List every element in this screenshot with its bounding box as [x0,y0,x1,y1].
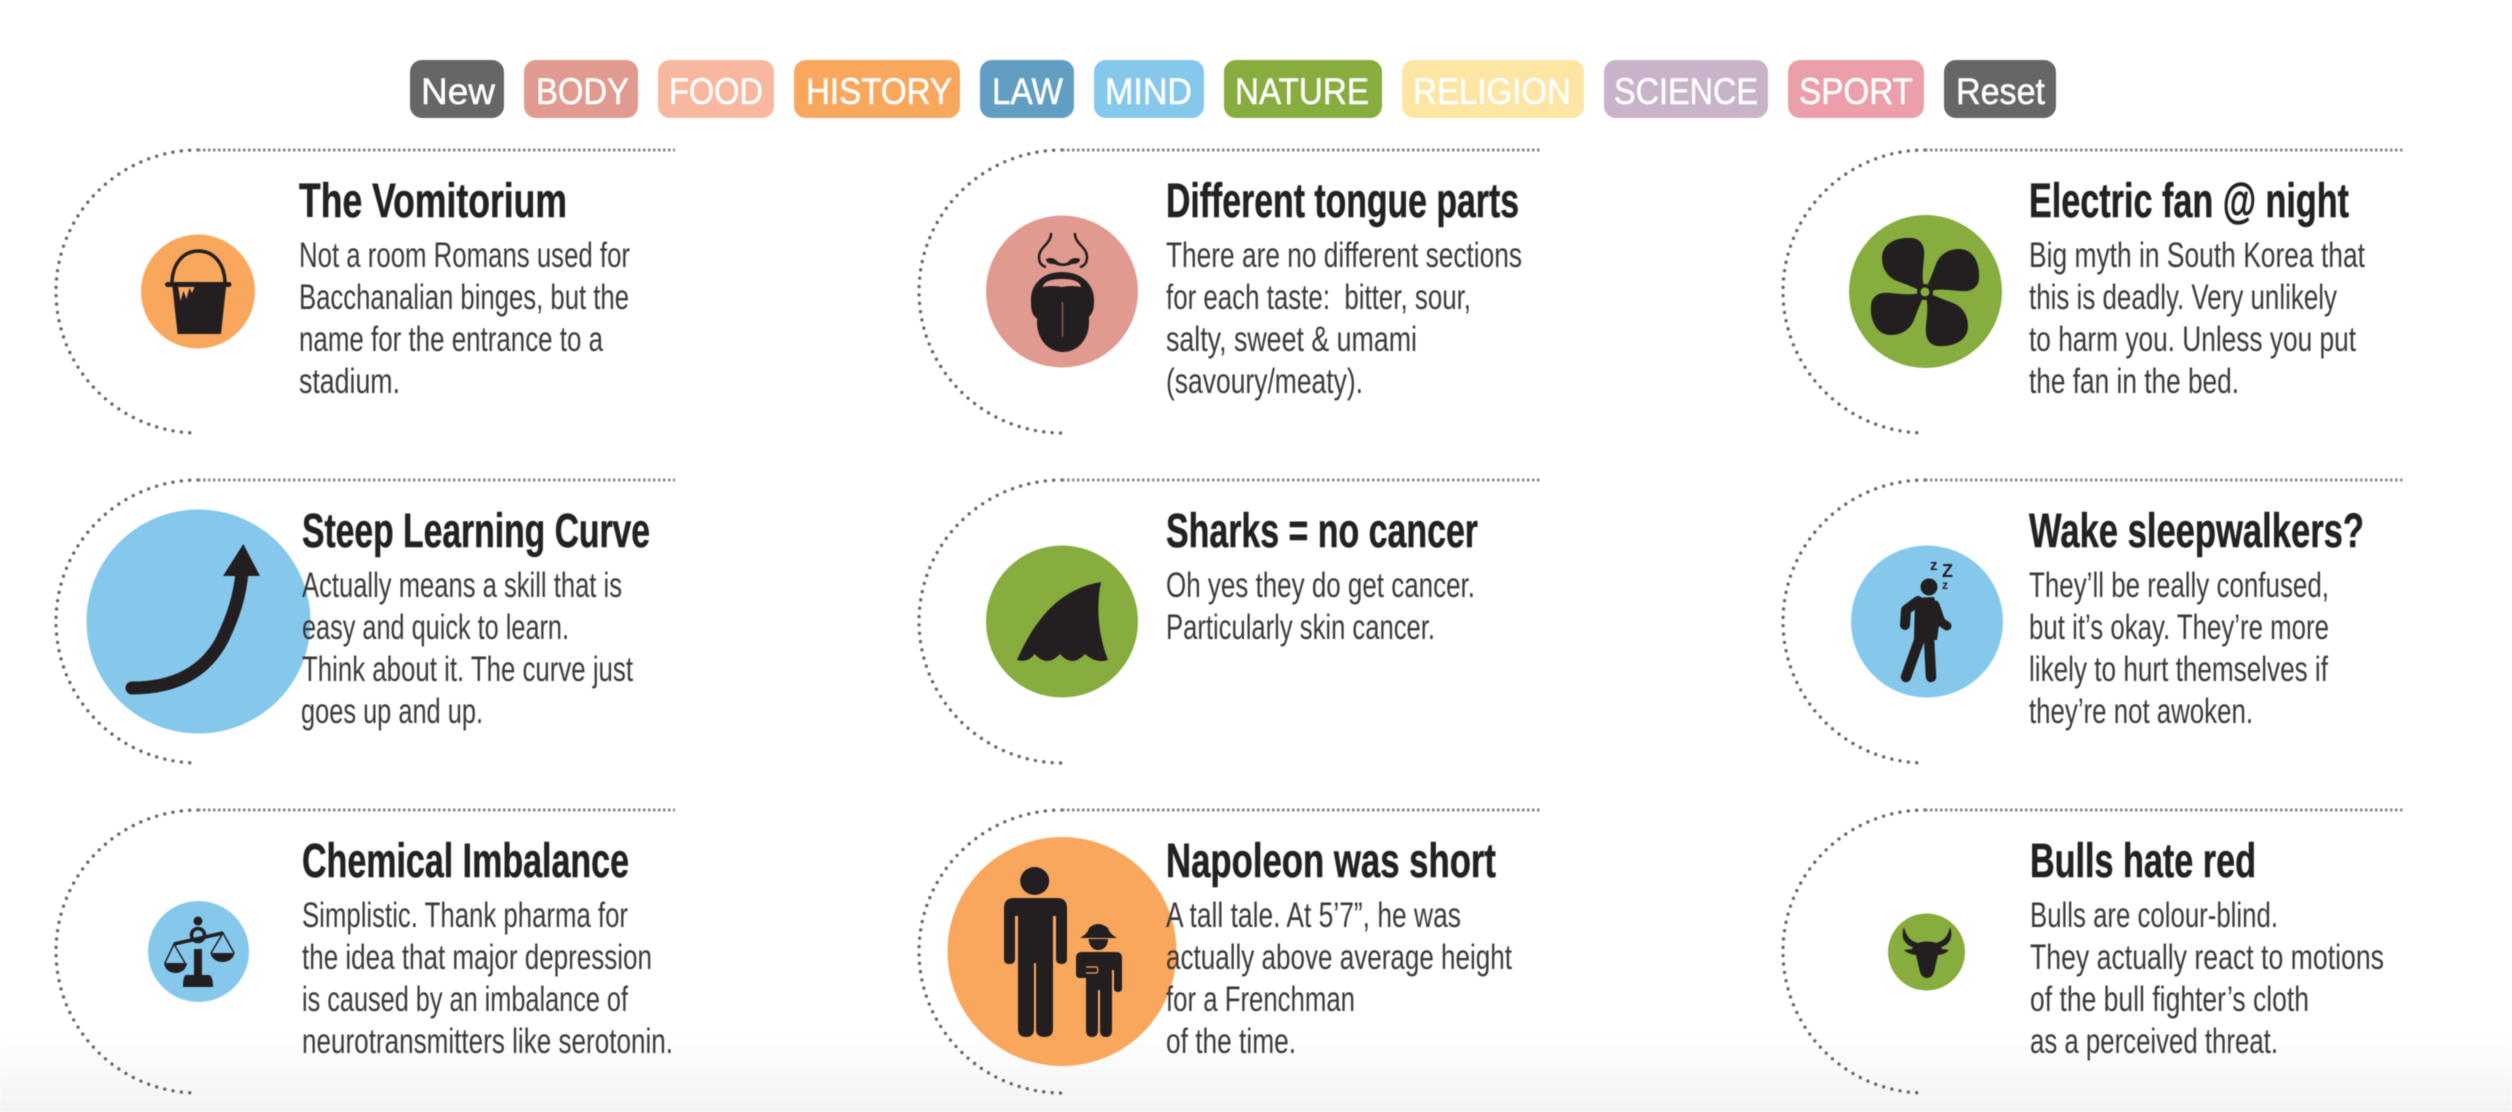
text block: actually above average height [1166,938,1512,977]
panel: Bulls hate red [1783,810,2403,1093]
text block [302,896,673,1061]
text block: They’ll be really confused, [2029,566,2329,605]
text block: this is deadly. Very unlikely [2029,278,2337,317]
text block: is caused by an imbalance of [302,980,628,1019]
text block: Simplistic. Thank pharma for [302,896,628,935]
icon: sleepwalker: Z [1942,561,1953,581]
heading: Bulls hate red [2030,835,2256,888]
text block: They actually react to motions [2030,938,2384,977]
icon: sleepwalker: z [1942,578,1948,592]
button: SPORT [1788,60,1924,118]
text block [1166,566,1475,647]
button: MIND: MIND [1105,71,1192,112]
icon: nose and tongue [986,216,1138,368]
text block: likely to hurt themselves if [2029,650,2328,689]
button: HISTORY [794,60,960,118]
text block: Big myth in South Korea that [2029,236,2365,275]
button: SPORT: SPORT [1799,71,1913,112]
text block: A tall tale. At 5’7”, he was [1166,896,1461,935]
text block: the fan in the bed. [2029,362,2239,401]
heading: Sharks = no cancer [1166,505,1478,558]
button: RELIGION: RELIGION [1413,71,1571,112]
text block: Think about it. The curve just [302,650,633,689]
button: MIND [1094,60,1204,118]
panel: Chemical Imbalance [56,810,675,1093]
icon: fan [1849,215,2002,368]
text block: name for the entrance to a [299,320,603,359]
text block: Bacchanalian binges, but the [299,278,629,317]
button: Reset [1944,60,2056,118]
text block [2029,566,2329,731]
button: LAW: LAW [992,71,1063,112]
button: FOOD [658,60,774,118]
button: New [410,60,504,118]
text block: as a perceived threat. [2030,1022,2278,1061]
panel: Sharks = no cancer [919,480,1540,763]
heading: Different tongue parts [1166,175,1519,228]
text block: of the time. [1166,1022,1296,1061]
button: SCIENCE: SCIENCE [1614,71,1758,112]
text block: of the bull fighter’s cloth [2030,980,2309,1019]
button: Reset: Reset [1956,71,2046,112]
text block: for each taste: bitter, sour, [1166,278,1471,317]
icon: rising curve arrow [86,510,310,734]
icon: shark fin [986,546,1138,698]
text block: Bulls are colour-blind. [2030,896,2278,935]
button: RELIGION [1402,60,1584,118]
button: NATURE [1224,60,1382,118]
button: LAW [980,60,1074,118]
heading: Electric fan @ night [2029,175,2349,228]
text block: but it’s okay. They’re more [2029,608,2329,647]
panel: Wake sleepwalkers? [1783,480,2403,763]
text block: to harm you. Unless you put [2029,320,2356,359]
button: BODY [524,60,638,118]
heading: Wake sleepwalkers? [2029,505,2364,558]
button: HISTORY: HISTORY [806,71,952,112]
text block: (savoury/meaty). [1166,362,1363,401]
text block: they’re not awoken. [2029,692,2253,731]
text block [2030,896,2384,1061]
text block: neurotransmitters like serotonin. [302,1022,673,1061]
text block: easy and quick to learn. [302,608,569,647]
button: SCIENCE [1604,60,1768,118]
panel: The Vomitorium [56,150,675,433]
text block [1166,236,1522,401]
icon: sleepwalker [1851,546,2003,698]
category filter buttons [410,60,2056,118]
text block [301,566,633,731]
heading: Steep Learning Curve [302,505,650,558]
heading: Chemical Imbalance [302,835,629,888]
heading: Napoleon was short [1166,835,1496,888]
text block: There are no different sections [1166,236,1522,275]
text block: Oh yes they do get cancer. [1166,566,1475,605]
button: New: New [421,71,495,112]
icon: scales [148,901,249,1002]
icon: bucket [141,234,255,348]
button: FOOD: FOOD [669,71,763,112]
panel: Different tongue parts [919,150,1540,433]
text block: Not a room Romans used for [299,236,630,275]
heading: The Vomitorium [299,175,567,228]
button: NATURE: NATURE [1235,71,1369,112]
text block [1166,896,1512,1061]
icon: sleepwalker: z [1930,557,1938,574]
icon: bull head [1888,914,1965,990]
panel: Electric fan @ night [1783,150,2403,433]
text block: for a Frenchman [1166,980,1355,1019]
text block [2029,236,2365,401]
text block: salty, sweet & umami [1166,320,1417,359]
text block: Actually means a skill that is [302,566,622,605]
text block: the idea that major depression [302,938,652,977]
panel: Napoleon was short [919,810,1540,1093]
text block: goes up and up. [301,692,483,731]
text block: Particularly skin cancer. [1166,608,1435,647]
text block: stadium. [299,362,400,401]
panel: Steep Learning Curve [56,480,675,763]
icon: tall man and Napoleon [948,837,1176,1066]
button: BODY: BODY [536,71,629,112]
text block [299,236,630,401]
